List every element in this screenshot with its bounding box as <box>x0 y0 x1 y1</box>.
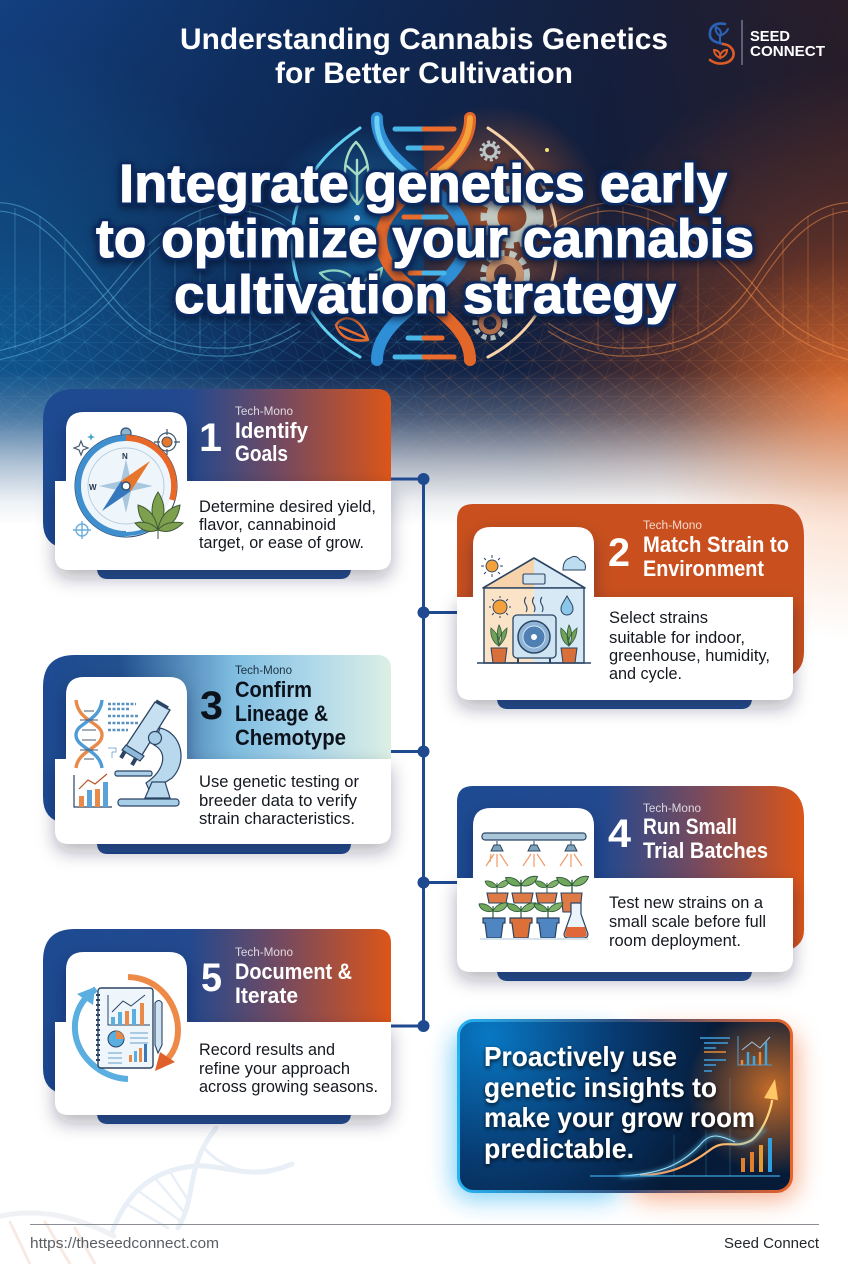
logo: Seed Connect: CONNECT <box>750 43 825 60</box>
step 4 heading: Trial Batches <box>643 838 768 863</box>
title <box>180 23 668 90</box>
step 4 body: small scale before full <box>609 913 766 931</box>
step 4 body: Test new strains on a <box>609 894 764 912</box>
blue helix strand <box>377 118 466 360</box>
main headline: cultivation strategy <box>174 265 676 325</box>
panel: step 1 Identify Goals <box>43 389 391 579</box>
step 2 body: greenhouse, humidity, <box>609 647 770 665</box>
step 3 body: breeder data to verify <box>199 792 358 810</box>
main headline: to optimize your cannabis <box>96 209 754 269</box>
step 1 body: target, or ease of grow. <box>199 534 364 552</box>
icon: greenhouse with fan <box>477 555 591 663</box>
step 5 body: refine your approach <box>199 1060 350 1078</box>
fade from hero to white page <box>0 260 848 1264</box>
panel: step 5 Document and Iterate <box>43 929 391 1124</box>
step 2 heading: Tech-Mono <box>643 520 702 532</box>
step 5 heading: Document & <box>235 959 352 984</box>
step 2 body: and cycle. <box>609 665 682 683</box>
callout text: genetic insights to <box>484 1072 717 1103</box>
step 1 heading <box>235 406 309 466</box>
step 5 body: Record results and <box>199 1041 335 1059</box>
step 2 body <box>609 609 770 683</box>
leaves <box>320 142 382 340</box>
step 4 body <box>609 894 766 950</box>
callout text: predictable. <box>484 1133 634 1164</box>
step 3 heading: Lineage & <box>235 701 328 726</box>
callout text: make your grow room <box>484 1102 755 1133</box>
connector timeline <box>388 473 459 1032</box>
step 3 heading: Chemotype <box>235 725 346 750</box>
step 3 heading: Confirm <box>235 677 312 702</box>
orange helix strand <box>381 118 470 360</box>
step 1 body <box>199 498 376 552</box>
step 5 body: across growing seasons. <box>199 1078 378 1096</box>
number 1: 1 <box>199 416 222 460</box>
step 2 heading: Match Strain to <box>643 532 789 557</box>
hero background <box>0 0 848 530</box>
step 5 heading: Iterate <box>235 983 298 1008</box>
title: for Better Cultivation <box>275 57 573 90</box>
callout text <box>484 1041 755 1164</box>
number 2: 2 <box>608 531 630 575</box>
icon: compass with leaf: N <box>122 452 128 461</box>
icon: grow lights and potted plants <box>479 833 588 939</box>
left DNA strand backdrop <box>0 203 300 362</box>
step 1 body: Determine desired yield, <box>199 498 376 516</box>
step 2 body: suitable for indoor, <box>609 629 745 647</box>
step 4 body: room deployment. <box>609 932 741 950</box>
step 4 heading: Tech-Mono <box>643 803 701 815</box>
step 3 heading <box>235 665 346 750</box>
footer: Seed Connect <box>724 1235 820 1252</box>
step 2 body: Select strains <box>609 609 708 627</box>
step 3 body: Use genetic testing or <box>199 773 359 791</box>
step 4 heading: Run Small <box>643 814 737 839</box>
faint footer DNA <box>0 1128 292 1264</box>
callout chart art <box>590 1036 780 1176</box>
title: Understanding Cannabis Genetics <box>180 23 668 56</box>
central DNA and gear emblem <box>250 100 614 370</box>
step 3 body <box>199 773 359 828</box>
number 4: 4 <box>608 812 632 856</box>
number 3: 3 <box>200 684 223 728</box>
step 1 heading: Tech-Mono <box>235 406 293 418</box>
footer <box>30 1224 820 1252</box>
step 2 heading: Environment <box>643 556 765 581</box>
callout: proactive insight <box>452 1020 798 1200</box>
main headline <box>96 154 754 325</box>
step 5 body <box>199 1041 378 1096</box>
step 5 heading: Tech-Mono <box>235 947 293 959</box>
step 1 heading: Goals <box>235 441 288 466</box>
gears <box>475 142 540 338</box>
step 1 body: flavor, cannabinoid <box>199 516 336 534</box>
step 1 heading: Identify <box>235 418 309 443</box>
panel: step 3 Confirm Lineage and Chemotype <box>43 655 391 854</box>
step 3 body: strain characteristics. <box>199 810 355 828</box>
main headline: Integrate genetics early <box>119 154 727 214</box>
icon: compass with leaf <box>73 428 183 539</box>
icon: DNA, microscope and chart <box>74 700 181 807</box>
callout text: Proactively use <box>484 1041 677 1072</box>
ring arcs <box>292 128 557 357</box>
logo mark <box>710 24 734 64</box>
panel: step 2 Match Strain to Environment <box>457 504 804 709</box>
logo: Seed Connect: SEED <box>750 28 790 45</box>
step 3 heading: Tech-Mono <box>235 665 292 677</box>
number 5: 5 <box>201 956 222 1000</box>
right DNA strand backdrop <box>548 203 848 362</box>
icon: compass with leaf: W <box>89 483 97 492</box>
icon: report with cycle arrows <box>75 977 178 1079</box>
step 4 heading <box>643 803 768 863</box>
helix rungs <box>395 129 454 357</box>
logo: Seed Connect <box>710 20 825 65</box>
panel: step 4 Run Small Trial Batches <box>457 786 804 981</box>
footer: https://theseedconnect.com <box>30 1235 219 1252</box>
step 2 heading <box>643 520 789 581</box>
step 5 heading <box>235 947 352 1008</box>
